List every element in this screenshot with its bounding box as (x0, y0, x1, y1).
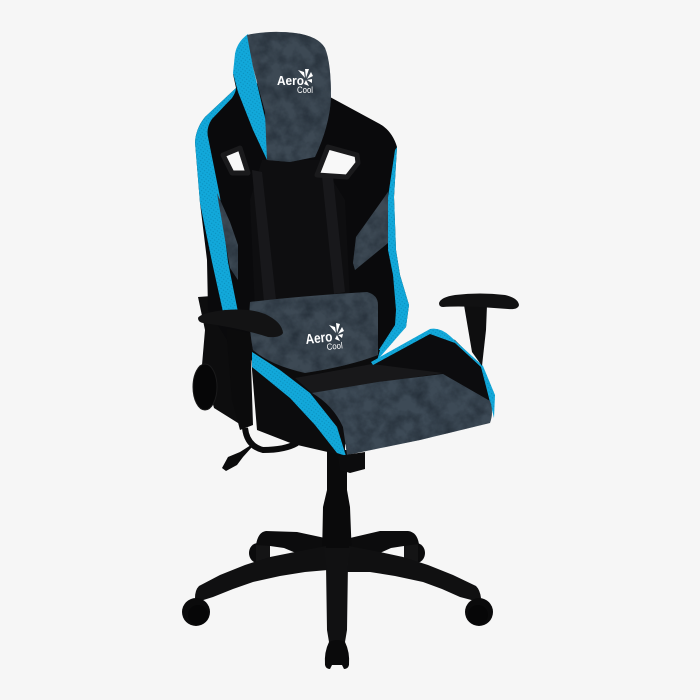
seat suede cushion (312, 374, 492, 455)
rear left leg (256, 531, 325, 553)
headrest suede (247, 32, 331, 162)
front right caster (465, 598, 493, 626)
centre front leg (324, 548, 351, 642)
left armrest (198, 310, 283, 430)
left shoulder strap (252, 170, 276, 302)
left mesh band (195, 88, 238, 312)
pillow subtext: Cool (326, 340, 343, 352)
rear right leg (350, 531, 419, 553)
central back panel (250, 160, 350, 310)
logo burst icon (298, 69, 313, 86)
backrest shell (195, 74, 409, 364)
seat centre fabric (295, 364, 443, 393)
right arm post (464, 305, 487, 366)
headrest (233, 32, 331, 162)
curved handle (245, 428, 297, 450)
lumbar pillow (249, 292, 378, 373)
pillow logo (305, 323, 344, 352)
right grey side panel (353, 192, 388, 270)
gas column (322, 450, 352, 558)
seat base filler (250, 340, 380, 456)
rear left caster (249, 543, 270, 563)
height lever (222, 445, 252, 471)
right seat mesh bolster (371, 329, 495, 418)
headrest logo (277, 69, 313, 95)
left belt opening (223, 148, 248, 173)
left arm post (226, 328, 253, 430)
front left caster (182, 598, 210, 626)
headrest mesh edge (233, 34, 268, 160)
backrest (195, 74, 409, 364)
pillow burst icon (329, 323, 344, 341)
column shroud (338, 452, 365, 473)
tilt mechanism (193, 296, 297, 471)
left seat mesh bolster (252, 352, 346, 456)
right belt opening (317, 147, 358, 177)
left grey side panel (217, 193, 238, 280)
right mesh band (371, 147, 409, 364)
right armrest (439, 294, 519, 366)
pillow suede (249, 292, 378, 373)
mechanism strut (198, 296, 245, 425)
left front leg (195, 546, 328, 602)
front centre caster (325, 640, 349, 669)
rear right caster (404, 543, 425, 563)
right shoulder strap (322, 176, 345, 294)
logo subtext: Cool (297, 85, 313, 95)
seat rear black panel (290, 330, 492, 440)
right front leg (347, 546, 481, 602)
logo wordmark: Aero (277, 73, 304, 88)
tilt knob (193, 364, 217, 410)
chair base (182, 450, 493, 669)
seat (249, 292, 495, 456)
pillow wordmark: Aero (305, 328, 333, 347)
right arm pad (439, 294, 519, 309)
left arm pad (198, 310, 283, 337)
